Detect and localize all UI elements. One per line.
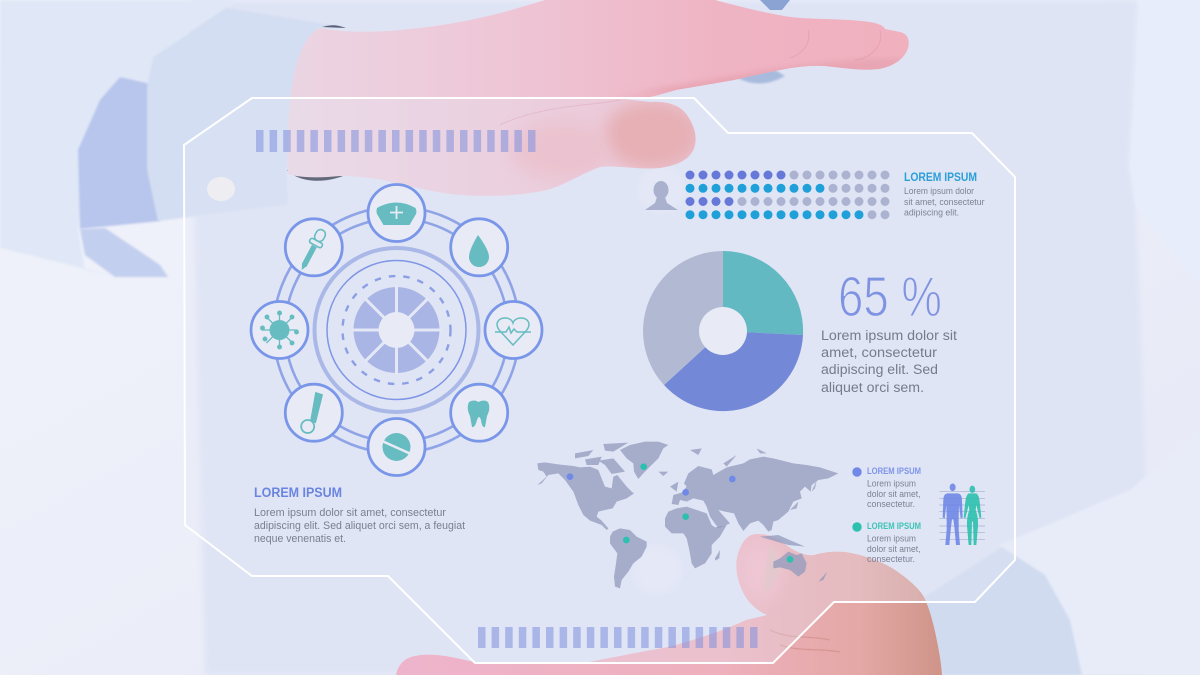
legend item: blue: LOREM IPSUM (867, 466, 921, 476)
female figure (964, 486, 981, 545)
icon: heartbeat (495, 318, 531, 345)
heading: LOREM IPSUM (254, 485, 342, 500)
stat description: Lorem ipsum dolor sit (821, 328, 957, 343)
bottom tick bars (478, 627, 758, 648)
thumb shading (604, 101, 700, 169)
dot matrix chart (686, 170, 890, 219)
world map (537, 442, 838, 588)
stat description (821, 328, 957, 395)
cuff shadow under wrist (287, 170, 352, 181)
icon: dropper (296, 227, 329, 273)
paragraph: sit amet, consectetur (904, 197, 984, 208)
legend item: blue (852, 466, 921, 509)
legend item: teal: Lorem ipsum (867, 534, 916, 544)
finger crease lines (500, 30, 881, 125)
paragraph (254, 507, 465, 545)
icon: nurse cap (376, 202, 416, 225)
65 percent stat: 65 % (838, 265, 942, 329)
paragraph: neque venenatis et. (254, 533, 346, 545)
Arctic islands (575, 443, 628, 474)
icon badges (251, 184, 542, 476)
paragraph: adipiscing elit. Sed aliquet orci sem, a feugiat (254, 520, 465, 532)
right coat sleeve (1130, 0, 1200, 287)
left shirt lower fold (80, 228, 168, 277)
heading: LOREM IPSUM (904, 170, 977, 184)
stethoscope glimpses (738, 70, 785, 84)
outer double ring (274, 207, 520, 453)
North America (537, 462, 634, 530)
legend item: teal (852, 521, 921, 564)
right lower coat sleeve (1000, 430, 1200, 675)
paragraph (904, 186, 984, 218)
top tick bars (256, 130, 536, 152)
top-right text block (904, 170, 984, 218)
icon: water drop (469, 235, 489, 267)
thumbnail (765, 544, 780, 590)
top hand (280, 0, 920, 200)
paragraph: Lorem ipsum dolor (904, 186, 974, 197)
left shirt inner fold (78, 77, 160, 229)
glass panel outline (184, 98, 1015, 663)
human figures (939, 483, 985, 545)
bottom-left text block (254, 485, 465, 545)
stat description: aliquet orci sem. (821, 380, 924, 395)
paragraph: adipiscing elit. (904, 208, 959, 218)
Africa (665, 507, 727, 568)
lab coat body (190, 0, 1146, 675)
islands (658, 448, 827, 582)
right shirt cuff (924, 547, 1082, 675)
icon: person (645, 181, 678, 210)
Australia (773, 552, 807, 577)
left coat sleeve (0, 0, 240, 277)
map location markers (567, 463, 793, 563)
South America (610, 528, 647, 588)
icon: virus (261, 311, 298, 349)
left cuff (147, 8, 345, 221)
icon: thermometer (301, 393, 322, 433)
bottom hand (390, 525, 950, 675)
thumb tip highlight (746, 547, 778, 592)
cuff button (207, 177, 235, 201)
legend item: blue: dolor sit amet, (867, 489, 920, 499)
finger underside (656, 60, 899, 94)
stat description: adipiscing elit. Sed (821, 362, 938, 377)
medical icon wheel (251, 184, 542, 476)
legend item: teal: LOREM IPSUM (867, 521, 921, 531)
faint coat button ghosts (639, 168, 683, 212)
Eurasia (672, 457, 838, 532)
legend item: teal: consectetur. (867, 554, 915, 564)
stat description: amet, consectetur (821, 345, 938, 360)
knuckle shading (514, 124, 599, 176)
inner rings (314, 248, 478, 412)
segmented centre wheel (352, 285, 442, 375)
paragraph: Lorem ipsum dolor sit amet, consectetur (254, 507, 446, 519)
male figure (943, 483, 963, 545)
donut chart (643, 251, 803, 411)
thumb creases (770, 630, 840, 652)
Greenland (620, 442, 668, 479)
icon: pill (382, 433, 411, 461)
icon: tooth (468, 400, 489, 427)
legend item: blue: consectetur. (867, 499, 915, 509)
legend item: teal: dolor sit amet, (867, 544, 920, 554)
legend item: blue: Lorem ipsum (867, 478, 916, 488)
